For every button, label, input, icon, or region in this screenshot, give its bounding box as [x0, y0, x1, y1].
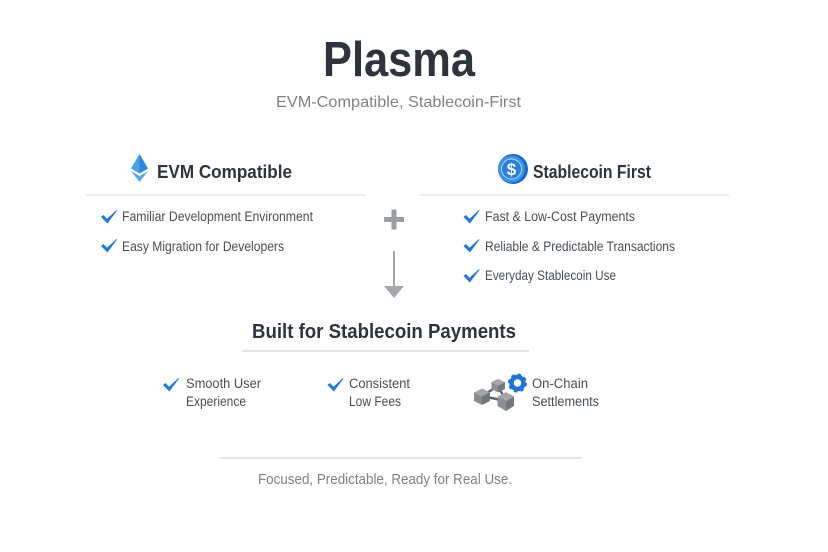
- item: everyday use: Everyday Stablecoin Use: [485, 268, 616, 283]
- heading: EVM Compatible: EVM Compatible: [157, 161, 292, 182]
- benefit: consistent low fees: [328, 376, 410, 409]
- benefit: smooth user experience: Smooth User: [186, 376, 261, 391]
- item: fast payments: Fast & Low-Cost Payments: [485, 209, 635, 224]
- panel: EVM compatible: [86, 154, 366, 254]
- item: easy migration: Easy Migration for Developers: [122, 239, 284, 254]
- benefit: on-chain settlements: On-Chain: [532, 376, 588, 391]
- panel: stablecoin first: [420, 154, 729, 283]
- icon: dollar coin: $: [507, 160, 517, 179]
- item: reliable transactions: Reliable & Predictable Transactions: [485, 239, 675, 254]
- benefit: consistent low fees: Consistent: [349, 376, 410, 391]
- heading: Stablecoin First: Stablecoin First: [533, 161, 651, 182]
- benefit: on-chain settlements: Settlements: [532, 394, 599, 409]
- footer tagline: Focused, Predictable, Ready for Real Use.: [258, 472, 512, 488]
- benefit: on-chain settlements: [474, 374, 599, 411]
- benefit: consistent low fees: Low Fees: [349, 394, 401, 409]
- icon: ethereum diamond: [131, 154, 148, 182]
- icon: dollar coin: [498, 154, 528, 184]
- icon: plus: [384, 210, 404, 230]
- title: Plasma: [323, 33, 476, 87]
- icon: connected blocks: [474, 379, 514, 411]
- benefit: smooth user experience: Experience: [186, 394, 246, 409]
- subtitle: EVM-Compatible, Stablecoin-First: [276, 94, 522, 111]
- arrow: down: [384, 251, 404, 298]
- item: familiar development environment: Familiar Development Environment: [122, 209, 313, 224]
- icon: gear: [509, 374, 526, 392]
- benefit: smooth user experience: [163, 376, 261, 409]
- heading: built for stablecoin payments: Built for Stablecoin Payments: [252, 321, 516, 343]
